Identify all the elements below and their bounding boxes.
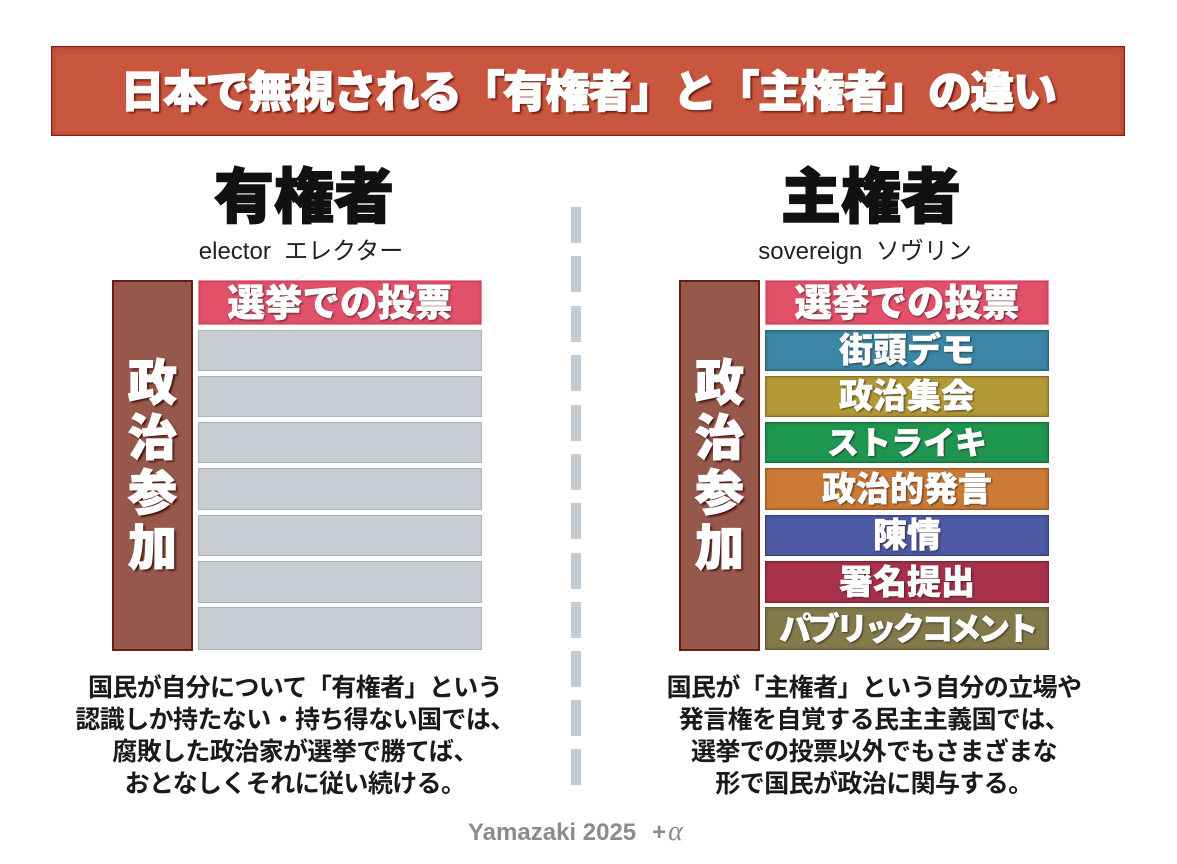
row: petitions	[765, 515, 1049, 556]
empty row 4	[198, 468, 482, 510]
text block: sovereign explanation: 形で国民が政治に関与する。	[715, 770, 1033, 798]
row: political rallies: 政治集会	[839, 378, 975, 416]
side label: political participation: 参	[695, 467, 744, 521]
text block: elector explanation: 腐敗した政治家が選挙で勝てば、	[112, 738, 478, 766]
heading: elector: 有権者	[214, 164, 394, 231]
side label: political participation	[679, 280, 760, 651]
row: signature submission	[765, 561, 1049, 603]
row: political speech: 政治的発言	[822, 471, 992, 509]
side label: political participation	[112, 280, 193, 651]
text block: sovereign explanation: 選挙での投票以外でもさまざまな	[691, 738, 1057, 766]
row: petitions: 陳情	[873, 517, 941, 555]
side label: political participation: 治	[128, 412, 177, 466]
empty row 7	[198, 607, 482, 650]
row: strikes	[765, 422, 1049, 463]
text block: sovereign explanation	[667, 674, 1081, 798]
row: street demonstrations: 街頭デモ	[839, 332, 975, 370]
dashed divider	[571, 207, 581, 785]
empty row 1	[198, 330, 482, 371]
row: political rallies	[765, 376, 1049, 417]
side label: political participation: 加	[695, 522, 744, 576]
empty row 6	[198, 561, 482, 603]
row: signature submission: 署名提出	[839, 564, 975, 602]
text block: elector explanation	[75, 674, 515, 798]
subheading: elector: elector エレクター	[199, 238, 403, 265]
empty row 5	[198, 515, 482, 556]
heading: sovereign: 主権者	[781, 164, 961, 231]
side label: political participation: 政	[128, 357, 177, 411]
row: political speech	[765, 468, 1049, 510]
text block: elector explanation: 認識しか持たない・持ち得ない国では、	[75, 706, 515, 734]
title banner	[51, 46, 1125, 136]
title banner: 日本で無視される「有権者」と「主権者」の違い	[120, 68, 1056, 117]
side label: political participation: 政	[695, 357, 744, 411]
row: strikes: ストライキ	[827, 425, 987, 461]
row: voting in elections: 選挙での投票	[228, 282, 452, 324]
side label: political participation: 加	[128, 522, 177, 576]
text block: elector explanation: 国民が自分について「有権者」という	[88, 674, 502, 702]
row: public comment: パブリックコメント	[779, 611, 1035, 647]
subheading: sovereign: sovereign ソヴリン	[758, 238, 972, 265]
panel: sovereign participation chart	[679, 280, 1049, 651]
row: street demonstrations	[765, 330, 1049, 371]
text block: sovereign explanation: 発言権を自覚する民主主義国では、	[679, 706, 1069, 734]
text block: sovereign explanation: 国民が「主権者」という自分の立場や	[667, 674, 1081, 702]
panel: elector participation chart	[112, 280, 482, 651]
empty row 3	[198, 422, 482, 463]
credit: Yamazaki 2025 +α	[468, 816, 683, 847]
row: voting in elections: 選挙での投票	[794, 282, 1020, 324]
text block: elector explanation: おとなしくそれに従い続ける。	[125, 770, 465, 798]
side label: political participation: 参	[128, 467, 177, 521]
side label: political participation: 治	[695, 412, 744, 466]
empty row 2	[198, 376, 482, 417]
